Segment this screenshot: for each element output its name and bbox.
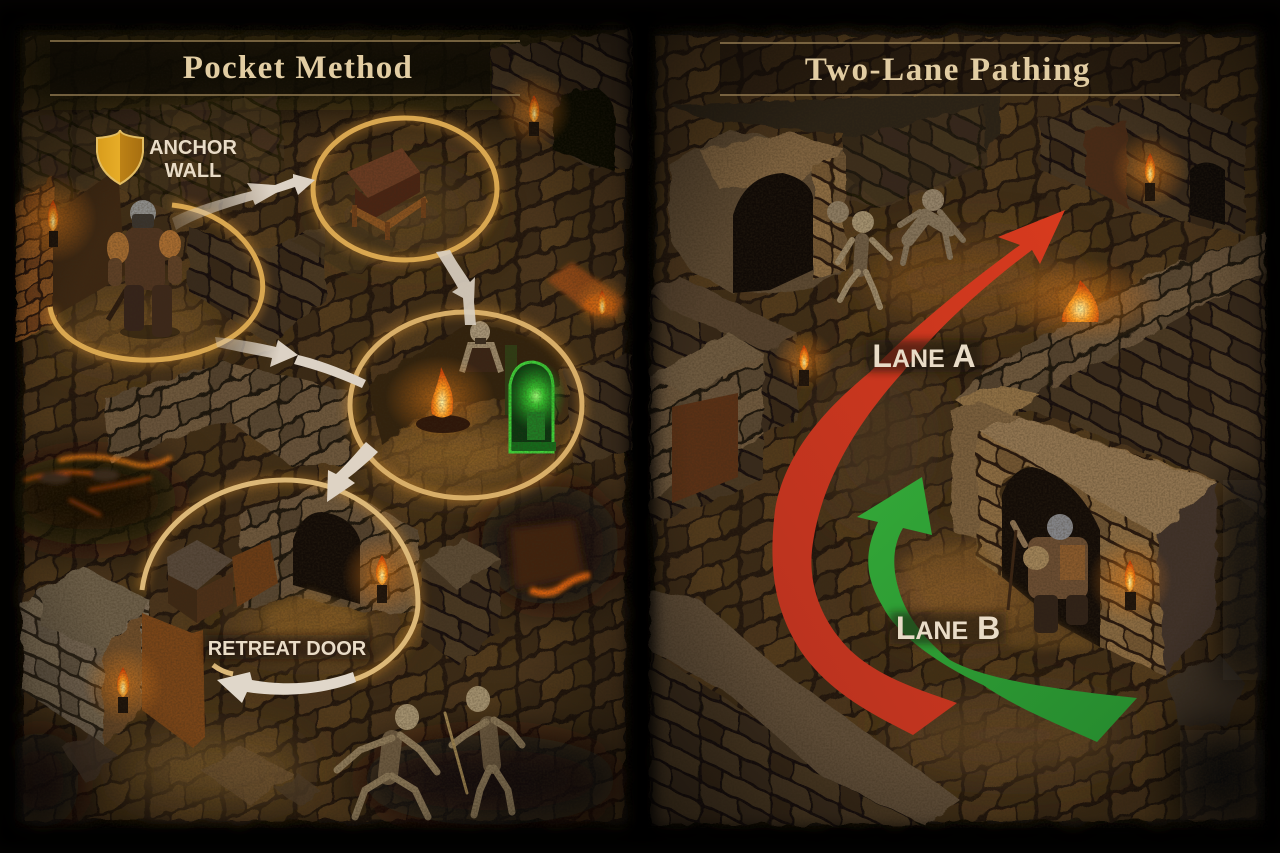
arrow: anchor to chest	[172, 174, 315, 230]
lower left tower	[22, 567, 150, 744]
wooden door left	[672, 393, 738, 503]
arrow: retreat	[217, 672, 356, 703]
vignette	[15, 25, 633, 828]
path circle 4	[142, 480, 418, 680]
path circle 1	[50, 205, 263, 360]
left title banner	[50, 41, 520, 95]
arrow: camp to door	[327, 442, 378, 502]
floor slabs bottom	[60, 735, 118, 782]
label: anchor wall: WALL	[165, 160, 221, 182]
skeletons top	[827, 189, 963, 307]
right panel base	[655, 32, 1259, 822]
knight	[107, 200, 182, 339]
stone arch opening	[733, 173, 813, 293]
right title banner	[720, 43, 1180, 95]
right rubble wall	[565, 355, 632, 465]
retreat door	[142, 613, 205, 748]
label: Lane B: LANE B	[896, 610, 1000, 646]
stone speckle overlay	[15, 25, 633, 828]
shield icon	[97, 130, 143, 184]
crates	[167, 540, 278, 623]
upper step stones	[301, 224, 400, 274]
right floor texture	[656, 36, 1258, 820]
torches left panel	[7, 72, 630, 725]
dark arch top right	[553, 89, 615, 172]
fire on floor	[1002, 258, 1162, 342]
stone speckle overlay	[648, 25, 1268, 828]
back left wall	[18, 96, 284, 213]
torches right panel	[774, 132, 1188, 622]
lava upper right	[547, 262, 625, 318]
middle stone ledge	[105, 362, 352, 465]
panel: Two-Lane Pathing	[648, 25, 1268, 828]
shadow right of arch	[1180, 480, 1267, 820]
rubble right	[1167, 655, 1247, 727]
camp alcove back wall	[368, 322, 565, 445]
label: anchor wall: ANCHOR	[149, 137, 237, 159]
label: Lane A: LANE A	[872, 338, 976, 374]
top right wall with door	[1040, 92, 1245, 235]
bottom wall top	[650, 590, 960, 825]
lava cracks left	[25, 457, 170, 515]
skeleton at alcove	[462, 321, 501, 372]
diagonal wall front	[975, 265, 1265, 520]
stone arch	[670, 130, 845, 293]
lit brick wall by torch	[16, 175, 55, 345]
arch opening	[293, 512, 360, 604]
left title banner: Pocket Method	[183, 50, 413, 86]
top right dark opening	[1190, 162, 1225, 225]
arch tower	[952, 400, 1217, 675]
pocket stone block	[188, 225, 325, 345]
lit arch floor	[265, 590, 372, 645]
top back wall	[670, 92, 1000, 205]
warm floor pools	[55, 180, 545, 800]
left panel base	[22, 32, 626, 822]
right title banner: Two-Lane Pathing	[805, 52, 1091, 88]
dark regions	[0, 30, 630, 830]
warm floor right	[820, 242, 1130, 770]
lower arch wall	[240, 482, 418, 612]
Lane A red arrow	[772, 210, 1065, 735]
label: retreat door: RETREAT DOOR	[208, 638, 367, 660]
stone structures right	[650, 92, 1265, 825]
loot table	[347, 148, 428, 240]
Lane B green arrow	[857, 477, 1137, 742]
knight at arch	[1008, 514, 1088, 633]
arrow: chest to camp	[436, 250, 476, 325]
upper left door	[53, 168, 125, 317]
left floor texture	[24, 36, 624, 820]
path circle 3	[350, 312, 582, 498]
green shrine	[505, 345, 566, 452]
diagonal wall top	[955, 232, 1265, 420]
right pier	[420, 558, 501, 666]
bottom wall front	[650, 650, 920, 825]
lit arch floor	[900, 540, 1100, 650]
skeletons bottom	[337, 686, 522, 817]
path circle 2	[313, 118, 497, 260]
stone structures left	[16, 30, 632, 805]
vignette	[648, 25, 1268, 828]
panel: Pocket Method	[0, 25, 633, 830]
top right wall	[490, 30, 632, 168]
left wall block	[650, 277, 797, 525]
top right door	[1085, 122, 1128, 208]
back wall stones	[845, 105, 985, 208]
campfire	[385, 356, 495, 440]
arrow: pocket to camp	[215, 337, 366, 388]
arch tower opening	[1002, 467, 1100, 647]
lava lower right	[510, 520, 590, 593]
